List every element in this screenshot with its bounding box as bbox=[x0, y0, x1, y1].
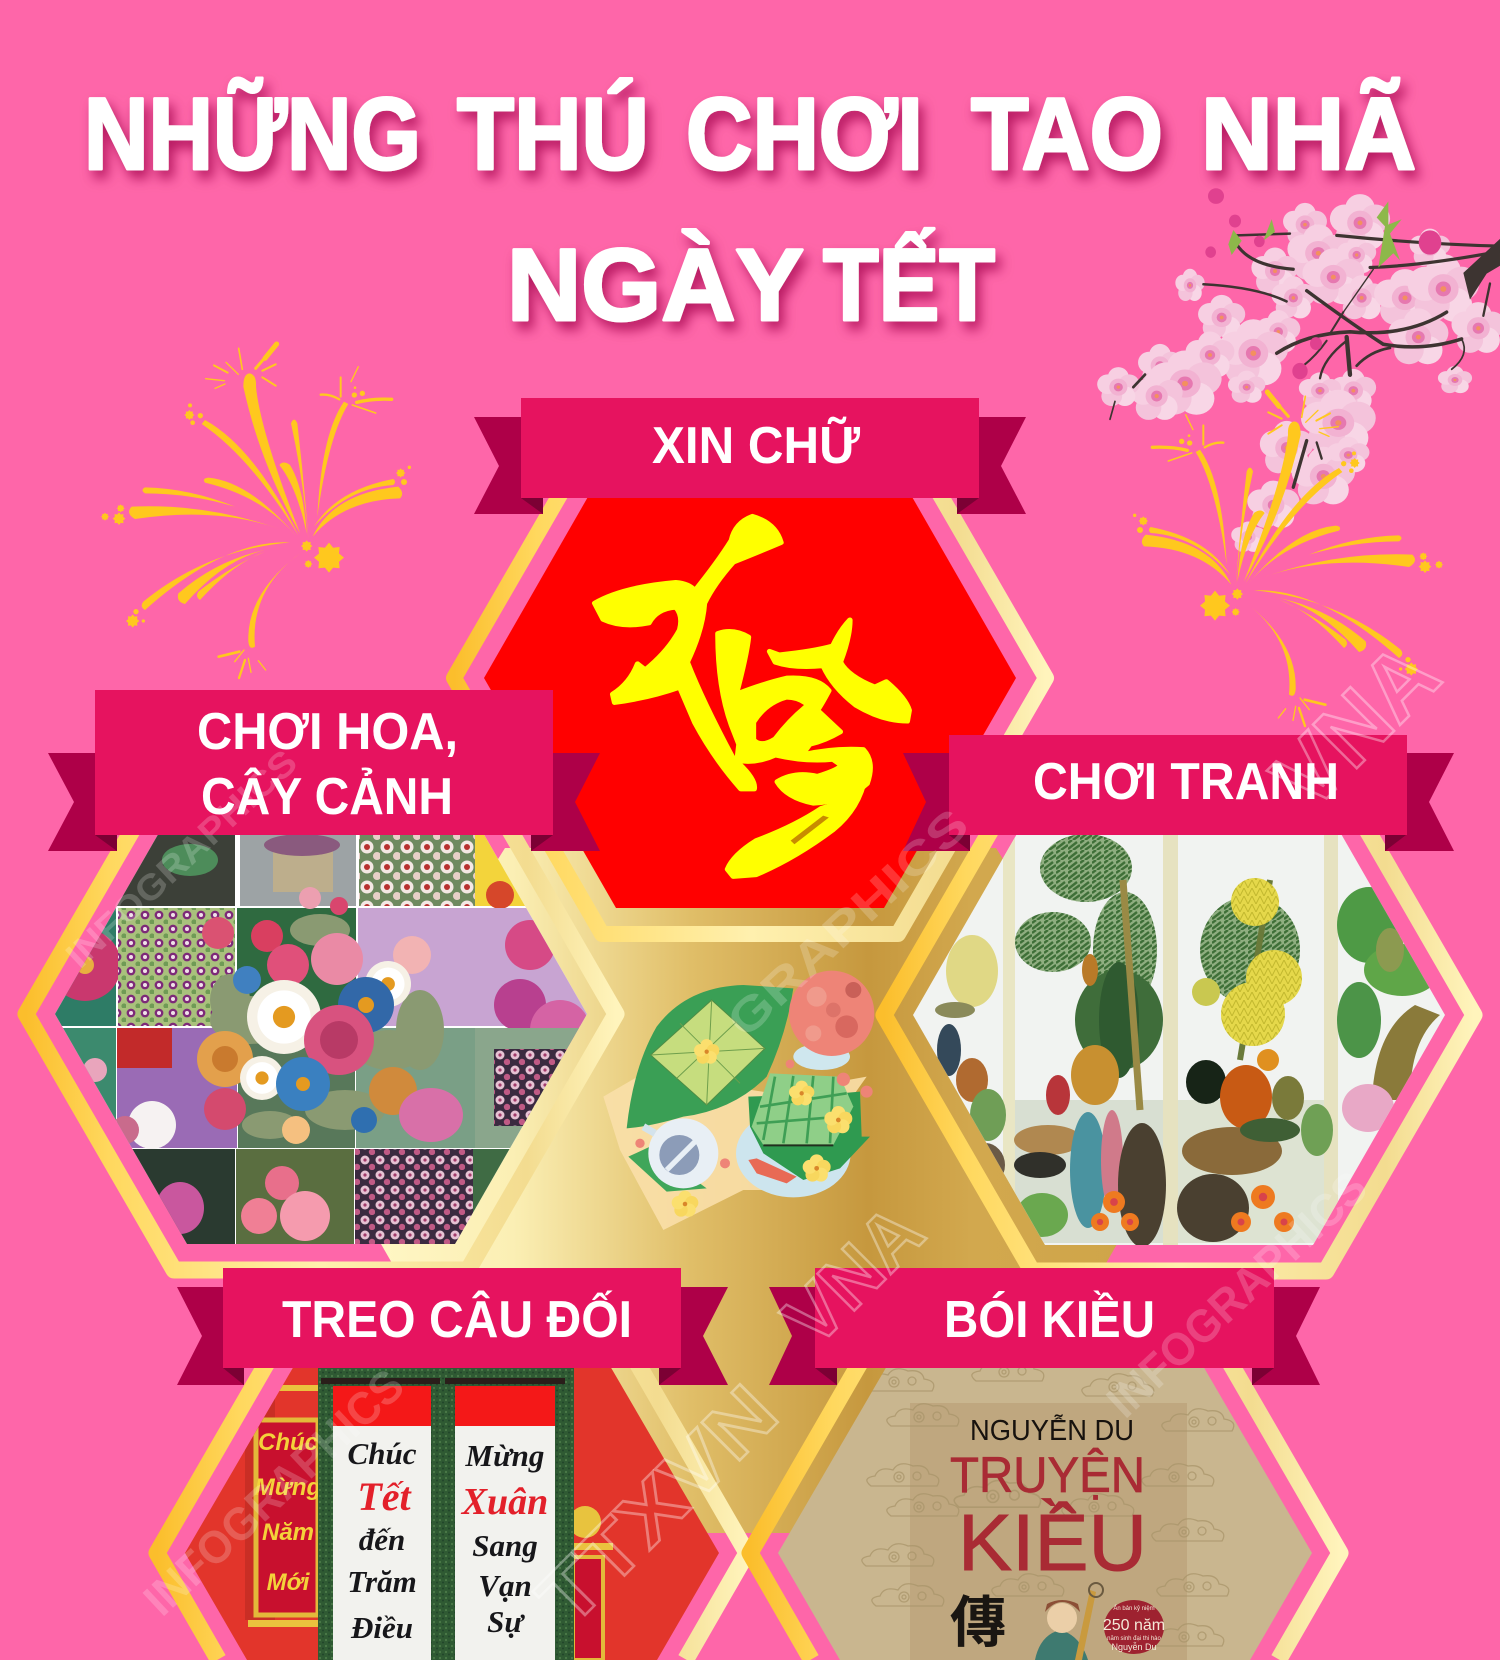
ribbon: treo cau doi: TREO CÂU ĐỐI bbox=[282, 1290, 632, 1349]
panel: truyen kieu book cover: NGUYỄN DU bbox=[970, 1413, 1134, 1447]
tray mat bbox=[603, 1073, 867, 1230]
painting two: bamboo and phoenix bbox=[1014, 834, 1166, 1247]
title: THÚ bbox=[457, 77, 649, 191]
collage tiles bbox=[55, 835, 587, 1244]
green board with scrolls: Mừng bbox=[465, 1438, 544, 1473]
title bbox=[84, 77, 1416, 342]
anniversary badge: 250 năm bbox=[1103, 1617, 1165, 1634]
illustration: banh chung tray bbox=[603, 971, 874, 1230]
ribbon: treo cau doi bbox=[177, 1268, 728, 1385]
title: CHƠI bbox=[686, 77, 923, 191]
ribbon: choi hoa, cay canh: CHƠI HOA, bbox=[197, 703, 458, 761]
watermark: INFOGRAPHICS and TTXVN: GRAPHICS bbox=[716, 798, 979, 1047]
watermark: INFOGRAPHICS and TTXVN: INFOGRAPHICS bbox=[57, 741, 305, 976]
title: NHỮNG bbox=[84, 77, 421, 191]
left hanging couplet bbox=[245, 1385, 322, 1627]
title: TAO bbox=[971, 77, 1163, 191]
watermark: INFOGRAPHICS and TTXVN: TTXVN bbox=[520, 1368, 794, 1642]
frame: xin chu hexagon bbox=[454, 422, 1046, 934]
painting three: chrysanthemum and rooster bbox=[1177, 878, 1333, 1243]
cloud pattern bbox=[862, 1359, 1234, 1646]
panel: couplets bbox=[185, 1368, 719, 1660]
right hanging couplet bbox=[574, 1506, 613, 1660]
bouquet bbox=[197, 887, 463, 1144]
ribbon: choi tranh: CHƠI TRANH bbox=[1033, 753, 1339, 811]
frame: choi hoa hexagon bbox=[26, 758, 616, 1270]
left hanging couplet: Năm bbox=[262, 1519, 314, 1546]
painting one: plum and peacocks bbox=[935, 935, 1006, 1187]
panel: xin chu red hexagon with calligraphy bbox=[484, 448, 1016, 908]
title: NHÃ bbox=[1201, 77, 1416, 191]
green board with scrolls: đến bbox=[359, 1522, 405, 1557]
watermark: INFOGRAPHICS and TTXVN: VNA bbox=[767, 1189, 940, 1362]
panel: truyen kieu book cover: TRUYỆN bbox=[950, 1447, 1145, 1503]
painting four: bonsai pine bbox=[1337, 887, 1440, 1132]
green board with scrolls: Sang bbox=[472, 1528, 538, 1563]
ribbon: choi tranh bbox=[903, 735, 1454, 851]
anniversary badge: năm sinh đại thi hào bbox=[1107, 1636, 1162, 1642]
anniversary badge bbox=[1103, 1600, 1165, 1654]
panel: flower collage bbox=[55, 835, 587, 1244]
teapot bbox=[628, 1118, 718, 1192]
panel: truyen kieu book cover bbox=[778, 1368, 1312, 1660]
firework right bbox=[1133, 392, 1443, 726]
ribbon: xin chu: XIN CHỮ bbox=[652, 416, 861, 475]
title: NGÀY bbox=[507, 228, 804, 342]
green board with scrolls: Xuân bbox=[461, 1481, 548, 1523]
icon: calligraphy counters bbox=[756, 700, 829, 844]
green board with scrolls: Vạn bbox=[478, 1568, 532, 1603]
watermark: INFOGRAPHICS and TTXVN: VNA bbox=[1253, 624, 1458, 829]
green board with scrolls: Chúc bbox=[348, 1436, 417, 1471]
ribbon: boi kieu bbox=[769, 1268, 1320, 1385]
ribbon: boi kieu: BÓI KIỀU bbox=[944, 1290, 1155, 1349]
central gold panel bbox=[381, 848, 1117, 1533]
watermark: INFOGRAPHICS and TTXVN bbox=[57, 624, 1458, 1642]
icon: yellow brush calligraphy bbox=[595, 516, 909, 876]
banana leaf bbox=[627, 985, 793, 1128]
frame: treo cau doi hexagon bbox=[157, 1297, 747, 1652]
ribbon: xin chu bbox=[474, 398, 1026, 514]
coral flowers bowl bbox=[789, 971, 874, 1070]
watermark: INFOGRAPHICS and TTXVN: INFOGRAPHICS bbox=[133, 1359, 414, 1625]
panel: truyen kieu book cover: KIỀU bbox=[958, 1498, 1147, 1587]
apricot blossom branch bbox=[1097, 188, 1500, 552]
green board with scrolls: Trăm bbox=[347, 1564, 417, 1599]
left hanging couplet: Chúc bbox=[258, 1429, 318, 1456]
frame: boi kieu hexagon bbox=[750, 1297, 1340, 1652]
left hanging couplet: Mừng bbox=[255, 1474, 322, 1501]
watermark: INFOGRAPHICS and TTXVN: INFOGRAPHICS bbox=[1096, 1161, 1377, 1427]
panel: paintings bbox=[913, 835, 1445, 1245]
panel: truyen kieu book cover: 傳 bbox=[950, 1591, 1006, 1654]
title: TẾT bbox=[823, 228, 995, 342]
left hanging couplet: Mới bbox=[267, 1569, 311, 1596]
green board with scrolls: Tết bbox=[357, 1474, 413, 1519]
green board with scrolls: Sự bbox=[487, 1604, 525, 1639]
anniversary badge: Nguyễn Du bbox=[1111, 1642, 1157, 1652]
plate bbox=[736, 1109, 851, 1197]
ribbon: choi hoa, cay canh: CÂY CẢNH bbox=[201, 767, 453, 826]
wrapped cake bbox=[651, 1000, 765, 1105]
green board with scrolls: Điều bbox=[350, 1610, 413, 1645]
leaf-wrapped cake with lattice bbox=[748, 1073, 870, 1183]
green board with scrolls bbox=[318, 1368, 574, 1660]
ribbon: choi hoa, cay canh bbox=[48, 690, 600, 851]
anniversary badge: Ấn bản kỷ niệm bbox=[1113, 1605, 1155, 1612]
figure with instrument bbox=[1035, 1583, 1103, 1660]
frame: choi tranh hexagon bbox=[884, 759, 1474, 1271]
firework left bbox=[101, 344, 411, 678]
